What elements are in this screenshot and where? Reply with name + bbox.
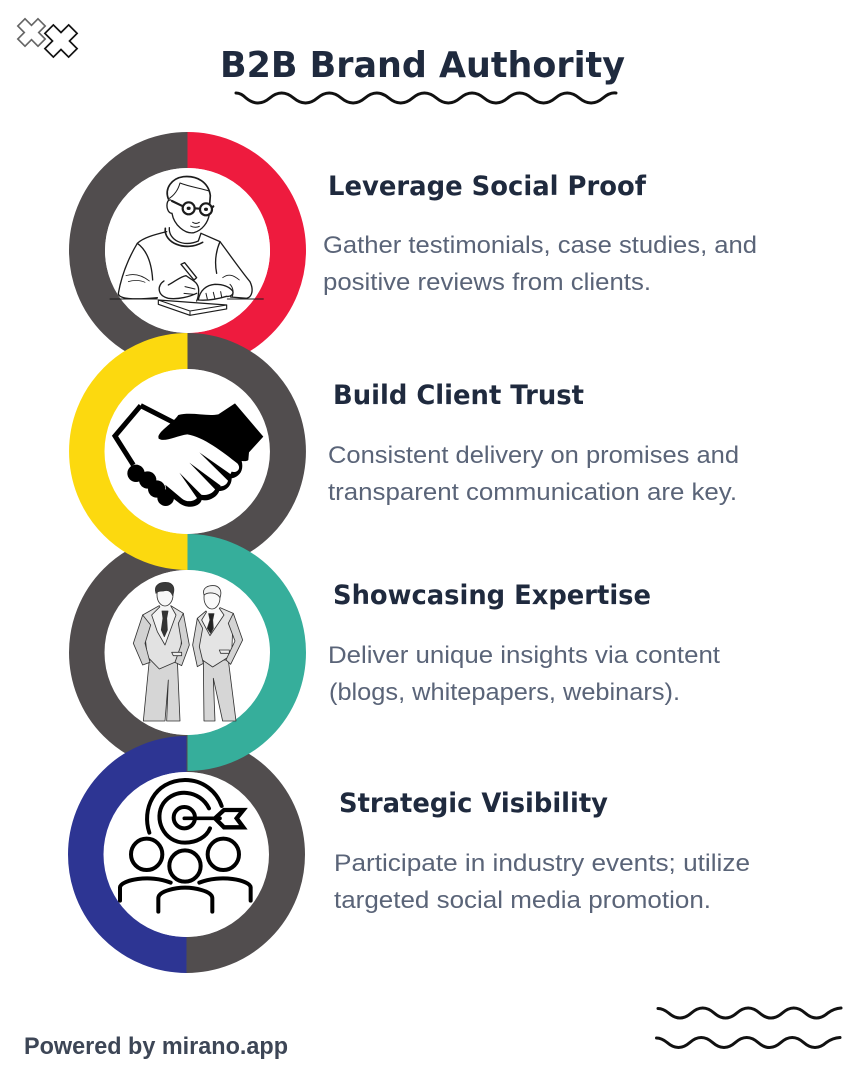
icon: two businessmen	[133, 582, 243, 721]
text block: Strategic Visibility: Participate in industry events; utilize	[334, 850, 750, 877]
text block: Strategic Visibility	[334, 788, 750, 914]
white hand	[133, 432, 239, 501]
ring 1 segments	[87, 150, 288, 351]
text block: Leverage Social Proof: Leverage Social Proof	[328, 171, 646, 202]
icon: decorative crosses	[11, 12, 85, 65]
decorative double wave	[656, 1008, 841, 1048]
text block: Showcasing Expertise: (blogs, whitepapers, webinars).	[329, 679, 680, 706]
ring 3 grey segment	[87, 552, 188, 753]
ring 2 yellow segment	[87, 351, 188, 552]
sleeve outline	[115, 406, 173, 465]
right man	[193, 586, 243, 721]
text block: Showcasing Expertise: Showcasing Expertise	[333, 580, 651, 611]
text block: Leverage Social Proof: positive reviews from clients.	[323, 269, 651, 296]
icon: handshake	[115, 403, 263, 507]
title wavy underline	[236, 93, 616, 103]
text block: Build Client Trust: transparent communication are key.	[328, 479, 737, 506]
text block: Showcasing Expertise	[328, 580, 720, 706]
text block: Leverage Social Proof	[323, 171, 757, 296]
target rings and arrow	[147, 780, 243, 843]
ring 4 blue segment	[86, 754, 186, 955]
text block: Build Client Trust: Consistent delivery on promises and	[328, 442, 739, 469]
text block: Strategic Visibility: targeted social media promotion.	[334, 887, 711, 914]
ring 3 teal segment	[188, 552, 288, 753]
ring centres	[104, 168, 270, 937]
text block: Leverage Social Proof: Gather testimonials, case studies, and	[323, 232, 757, 259]
text block: Build Client Trust	[328, 380, 739, 506]
finger gaps	[179, 452, 233, 499]
ring 4 grey segment	[186, 754, 287, 955]
knuckles	[127, 465, 174, 506]
ring 2 grey segment	[188, 351, 288, 552]
black hand and outline	[158, 403, 263, 507]
icon: man writing in notebook	[110, 177, 263, 315]
footer credit: Powered by mirano.app	[24, 1033, 288, 1060]
left man	[133, 582, 189, 721]
text block: Strategic Visibility: Strategic Visibility	[339, 788, 608, 819]
title: B2B Brand Authority	[220, 45, 625, 86]
text block: Build Client Trust: Build Client Trust	[333, 380, 584, 411]
text block: Showcasing Expertise: Deliver unique insights via content	[328, 642, 720, 669]
icon: target with audience	[120, 780, 251, 912]
audience heads and shoulders	[120, 839, 251, 912]
ring chain	[86, 150, 288, 955]
